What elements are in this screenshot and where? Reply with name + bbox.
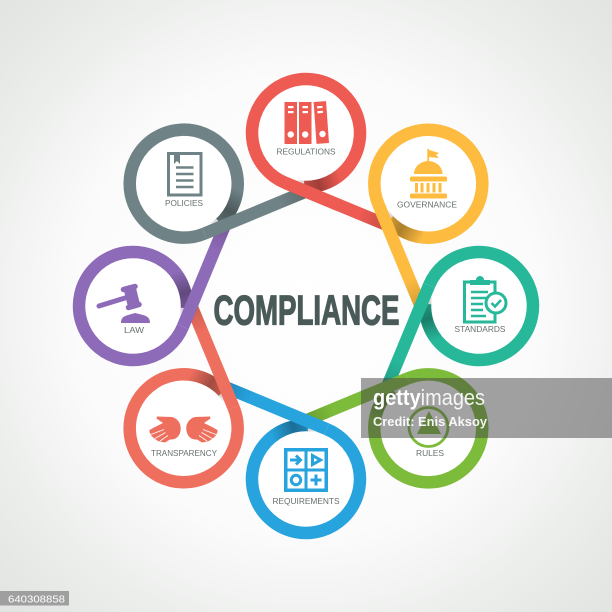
ring: standards xyxy=(387,252,533,387)
label: regulations: REGULATIONS xyxy=(276,146,336,156)
watermark band xyxy=(361,378,612,438)
panel: policies xyxy=(107,88,306,287)
ring: regulations xyxy=(252,79,387,225)
panel: governance xyxy=(325,107,524,306)
ring: governance xyxy=(325,107,524,306)
icon: clipboard with check xyxy=(464,276,506,322)
panel: law xyxy=(79,225,225,360)
ring: requirements xyxy=(225,387,360,533)
panel: regulations xyxy=(252,79,387,225)
watermark: credit: Credit: Enis Aksoy xyxy=(373,414,488,429)
image id tag: 640308858 xyxy=(8,594,65,606)
label: law: LAW xyxy=(124,325,144,335)
ribbon overlap: regulations tail above policies tail xyxy=(285,183,340,206)
icon: warning sign in circle xyxy=(409,408,448,446)
label: standards: STANDARDS xyxy=(454,324,506,334)
icon: control grid xyxy=(284,448,328,492)
label: governance: GOVERNANCE xyxy=(397,200,457,210)
icon: open hands xyxy=(150,416,218,442)
panel: requirements xyxy=(225,387,360,533)
watermark: gettyimages: gettyimages xyxy=(373,385,485,410)
icon: capitol building xyxy=(410,149,447,198)
ring: law xyxy=(79,225,225,360)
title: COMPLIANCE xyxy=(214,286,400,334)
icon: binders xyxy=(284,101,329,144)
label: requirements: REQUIREMENTS xyxy=(272,496,340,506)
label: transparency: TRANSPARENCY xyxy=(151,448,217,458)
panel: transparency xyxy=(88,306,287,505)
panel: standards xyxy=(387,252,533,387)
panel: rules xyxy=(306,325,505,524)
label: rules: RULES xyxy=(416,448,444,458)
ring: transparency xyxy=(88,306,287,505)
icon: document xyxy=(168,153,201,195)
ring: rules xyxy=(306,325,505,524)
image id tag xyxy=(0,591,69,606)
icon: gavel xyxy=(99,286,150,323)
ring: policies xyxy=(107,88,306,287)
label: policies: POLICIES xyxy=(165,198,203,208)
